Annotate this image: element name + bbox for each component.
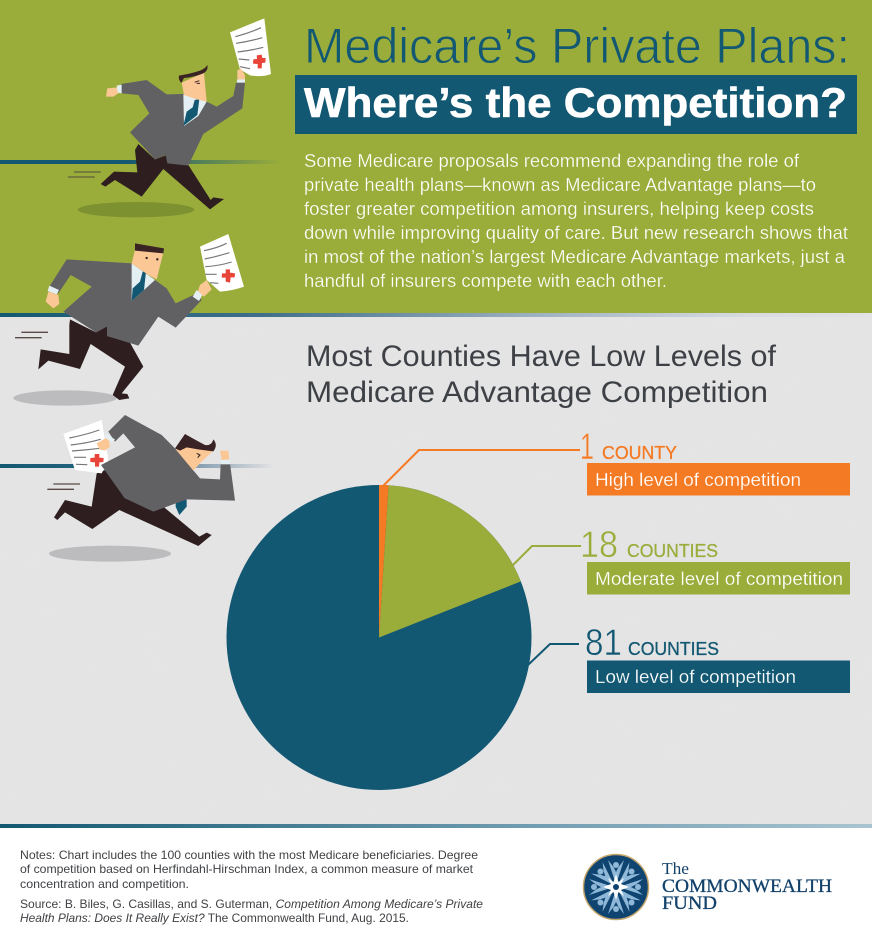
callout: 18 counties, moderate competition: 18 [580, 524, 618, 565]
callout: 81 counties, low competition: Low level of competition [595, 667, 796, 687]
callout: 1 county, high competition: High level of competition [595, 470, 801, 490]
logo: wordmark: The [662, 859, 689, 878]
text block: notes and source: Source: B. Biles, G. Casillas, and S. Guterman, Competition Among Medicare’s Private [20, 897, 483, 911]
illustration: middle running businessman [13, 234, 244, 406]
heading: chart title: Medicare Advantage Competition [306, 376, 768, 409]
text block: notes and source: Health Plans: Does It Really Exist? The Commonwealth Fund, Aug. 2015. [20, 911, 409, 925]
panel: white footer background [0, 828, 872, 950]
panel: grey chart background [0, 314, 872, 826]
pie chart: competition level by county [226, 485, 532, 790]
panel: green header background [0, 0, 872, 314]
callout: 18 counties, moderate competition: Moderate level of competition [595, 569, 843, 589]
text block: introduction: in most of the nation’s largest Medicare Advantage markets, just a [304, 247, 846, 267]
text block: introduction: Some Medicare proposals recommend expanding the role of [304, 151, 800, 171]
text block: introduction: down while improving quality of care. But new research shows that [304, 223, 848, 243]
logo: wordmark: COMMONWEALTH [662, 876, 832, 897]
leader line: moderate [513, 546, 581, 565]
callout: 81 counties, low competition [585, 622, 850, 693]
text block: notes and source: Notes: Chart includes the 100 counties with the most Medicare beneficiaries. Degree [20, 848, 478, 862]
illustration: top running businessman [68, 18, 271, 217]
callout: 81 counties, low competition: COUNTIES [628, 638, 719, 659]
title banner: Where's the Competition: Where’s the Competition? [304, 79, 847, 126]
heading: chart title [306, 340, 777, 409]
callout: 1 county, high competition [580, 426, 850, 496]
illustration: bottom running businessman [47, 415, 235, 562]
text block: introduction: foster greater competition among insurers, helping keep costs [304, 199, 814, 219]
text block: introduction: handful of insurers compete with each other. [304, 271, 667, 291]
logo: wordmark: FUND [662, 893, 717, 914]
text block: introduction [304, 151, 848, 291]
leader line: high [383, 450, 580, 486]
callout: 18 counties, moderate competition [580, 524, 850, 594]
logo: wordmark [662, 859, 832, 914]
leader line: low [528, 644, 579, 665]
callout: 81 counties, low competition: 81 [585, 622, 622, 663]
title: Medicare's Private Plans: Medicare’s Private Plans: [304, 18, 850, 74]
callout: 18 counties, moderate competition: COUNTIES [627, 540, 718, 561]
text block: notes and source: concentration and competition. [20, 877, 189, 891]
logo: The Commonwealth Fund seal [584, 854, 648, 920]
heading: chart title: Most Counties Have Low Levels of [306, 340, 777, 373]
callout: 1 county, high competition: COUNTY [602, 442, 677, 463]
text block: introduction: private health plans—known as Medicare Advantage plans—to [304, 175, 816, 195]
callout: 1 county, high competition: 1 [580, 426, 594, 467]
text block: notes and source [20, 848, 483, 925]
text block: notes and source: of competition based on Herfindahl-Hirschman Index, a common measure of market [20, 862, 474, 876]
